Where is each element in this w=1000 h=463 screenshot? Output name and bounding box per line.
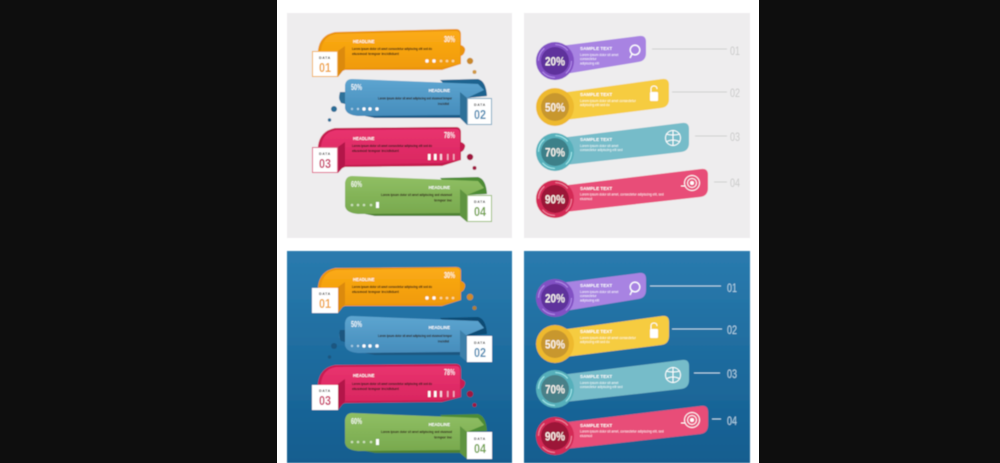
line and number — [695, 130, 740, 144]
banner 04 green: HEADLINE — [429, 185, 450, 190]
row 01 purple: consectetur — [580, 294, 597, 298]
banner 04 green: Lorem ipsum dolor sit amet adipiscing sed eiusmod — [381, 430, 452, 434]
banner 04 green — [345, 413, 492, 459]
row 03 teal: Lorem ipsum dolor sit amet — [580, 381, 619, 385]
row 03 teal — [536, 123, 740, 171]
icon: lock — [650, 323, 658, 338]
box 02: 02 — [474, 107, 486, 122]
box 04 — [460, 189, 492, 222]
line and number: 04 — [727, 414, 737, 428]
line and number: 01 — [730, 44, 740, 58]
box 03 — [312, 142, 345, 173]
box 03: 03 — [319, 393, 331, 408]
box 04 — [460, 426, 492, 459]
banner 04 green: Lorem ipsum dolor sit amet adipiscing sed eiusmod — [381, 193, 452, 197]
box 04: 04 — [474, 204, 487, 219]
box 02: DATA — [474, 103, 486, 107]
row 01 purple — [536, 36, 740, 80]
line and number — [652, 44, 740, 58]
row 01 purple — [536, 273, 737, 317]
row 01 purple: SAMPLE TEXT — [580, 283, 612, 288]
box 02 — [460, 330, 492, 362]
banner 02 blue: Lorem ipsum dolor sit amet adipiscing sed eiusmod tempor — [378, 96, 452, 100]
banner 03 pink — [312, 364, 476, 410]
row 04 pink: Lorem ipsum dolor sit amet, consectetur adipiscing elit, sed — [580, 192, 664, 196]
row 01 purple: 20% — [545, 54, 565, 68]
banner 02 blue — [328, 316, 492, 362]
row 02 yellow: Lorem ipsum dolor sit amet consectetur — [580, 99, 637, 103]
banner 02 blue: incidid — [438, 340, 449, 344]
rating icons — [428, 154, 454, 160]
banner 03 pink: 78% — [444, 368, 455, 377]
icon: target — [681, 412, 700, 428]
row 02 yellow: adipiscing elit sed do — [580, 340, 610, 344]
banner 04 green: tempor inc — [434, 198, 452, 202]
banner 03 pink: 78% — [444, 131, 455, 140]
row 02 yellow: SAMPLE TEXT — [580, 329, 612, 334]
line and number — [672, 86, 740, 100]
icon: target — [681, 176, 700, 190]
box 03: 03 — [319, 156, 331, 171]
row 03 teal: consectetur adipiscing elit sed — [580, 148, 623, 152]
banner 04 green: tempor inc — [434, 436, 452, 440]
row 04 pink: SAMPLE TEXT — [580, 186, 612, 191]
rating icons — [351, 202, 379, 208]
row 04 pink: 90% — [545, 192, 565, 206]
box 02: DATA — [474, 341, 486, 345]
row 02 yellow: Lorem ipsum dolor sit amet consectetur — [580, 336, 637, 340]
box 01 — [312, 282, 345, 313]
panel: light circles — [524, 13, 750, 238]
rating dots — [351, 344, 379, 348]
banner 03 pink — [312, 127, 476, 173]
box 01 — [312, 46, 345, 77]
banner 01 orange: eiusmod tempor incididunt — [352, 290, 400, 294]
line and number: 01 — [727, 281, 737, 295]
banner 01 orange: 30% — [444, 271, 455, 280]
banner 01 orange — [312, 267, 476, 313]
banner 03 pink: eiusmod tempor incididunt — [352, 387, 400, 391]
banner 03 pink: Lorem ipsum dolor sit amet consectetur adipiscing elit sed do — [352, 382, 432, 386]
row 04 pink: Lorem ipsum dolor sit amet, consectetur adipiscing elit, sed — [580, 430, 664, 434]
row 03 teal: consectetur adipiscing elit sed — [580, 385, 623, 389]
rating dots — [425, 59, 454, 63]
line and number — [712, 414, 737, 428]
banner 01 orange — [312, 29, 476, 77]
row 02 yellow — [536, 316, 737, 363]
line and number: 04 — [730, 176, 740, 190]
box 03: DATA — [319, 152, 331, 156]
row 03 teal: SAMPLE TEXT — [580, 137, 612, 142]
row 03 teal: SAMPLE TEXT — [580, 374, 612, 379]
icon: magnifier — [630, 45, 640, 58]
banner 04 green: HEADLINE — [429, 422, 450, 427]
banner 02 blue — [328, 79, 492, 125]
banner 01 orange: 30% — [444, 35, 455, 44]
banner 02 blue: 50% — [351, 320, 362, 329]
rating dots — [425, 296, 454, 300]
row 01 purple: adipiscing elit — [580, 62, 599, 66]
banner 04 green — [345, 176, 492, 222]
box 04: 04 — [474, 441, 487, 456]
line and number — [650, 281, 737, 295]
line and number: 02 — [727, 323, 737, 337]
box 03 — [312, 379, 345, 410]
row 04 pink: 90% — [545, 430, 565, 444]
white page column — [277, 0, 759, 463]
banner 04 green: 60% — [351, 180, 362, 189]
row 03 teal — [536, 360, 737, 408]
line and number: 02 — [730, 86, 740, 100]
row 04 pink: SAMPLE TEXT — [580, 423, 612, 428]
row 01 purple: Lorem ipsum dolor sit amet — [580, 53, 619, 57]
rating icons — [428, 391, 454, 397]
box 01: 01 — [319, 60, 331, 75]
row 03 teal: Lorem ipsum dolor sit amet — [580, 144, 619, 148]
row 02 yellow: SAMPLE TEXT — [580, 92, 612, 97]
row 04 pink: eiusmod — [580, 197, 592, 201]
row 02 yellow: 50% — [545, 338, 565, 352]
row 01 purple: 20% — [545, 292, 565, 306]
banner 02 blue: HEADLINE — [429, 88, 450, 93]
banner 03 pink: Lorem ipsum dolor sit amet consectetur adipiscing elit sed do — [352, 144, 432, 148]
rating icons — [351, 439, 379, 445]
panel: blue banners — [287, 251, 512, 463]
box 02 — [460, 92, 492, 125]
line and number — [714, 176, 740, 190]
banner 04 green: 60% — [351, 417, 362, 426]
row 03 teal: 70% — [545, 382, 565, 396]
banner 02 blue: Lorem ipsum dolor sit amet adipiscing sed eiusmod tempor — [378, 334, 452, 338]
box 04: DATA — [474, 437, 486, 441]
box 02: 02 — [474, 345, 486, 360]
line and number: 03 — [727, 367, 737, 381]
banner 02 blue: HEADLINE — [429, 325, 450, 330]
banner 01 orange: eiusmod tempor incididunt — [352, 52, 400, 56]
banner 01 orange: HEADLINE — [353, 39, 375, 44]
row 01 purple: SAMPLE TEXT — [580, 46, 612, 51]
row 01 purple: consectetur — [580, 57, 597, 61]
banner 03 pink: HEADLINE — [353, 373, 375, 378]
banner 02 blue: 50% — [351, 83, 362, 92]
box 01: 01 — [319, 296, 331, 311]
banner 02 blue: incidid — [438, 102, 449, 106]
icon: lock — [650, 86, 658, 101]
row 04 pink: eiusmod — [580, 434, 592, 438]
line and number: 03 — [730, 130, 740, 144]
line and number — [694, 367, 737, 381]
row 02 yellow — [536, 79, 740, 126]
rating dots — [351, 107, 379, 111]
box 01: DATA — [319, 292, 331, 296]
line and number — [672, 323, 737, 337]
icon: wheel — [666, 367, 680, 383]
row 04 pink — [536, 406, 737, 455]
icon: wheel — [666, 130, 680, 146]
row 04 pink — [536, 169, 740, 218]
row 01 purple: Lorem ipsum dolor sit amet — [580, 290, 619, 294]
banner 01 orange: HEADLINE — [353, 277, 375, 282]
banner 03 pink: eiusmod tempor incididunt — [352, 149, 400, 153]
box 01: DATA — [319, 56, 331, 60]
panel: light banners — [287, 13, 512, 238]
icon: magnifier — [630, 282, 640, 295]
box 03: DATA — [319, 389, 331, 393]
banner 01 orange: Lorem ipsum dolor sit amet consectetur adipiscing elit sed do — [352, 47, 432, 51]
row 02 yellow: 50% — [545, 100, 565, 114]
row 01 purple: adipiscing elit — [580, 298, 599, 302]
banner 01 orange: Lorem ipsum dolor sit amet consectetur adipiscing elit sed do — [352, 285, 432, 289]
panel: blue circles — [524, 251, 750, 463]
row 02 yellow: adipiscing elit sed do — [580, 103, 610, 107]
banner 03 pink: HEADLINE — [353, 136, 375, 141]
box 04: DATA — [474, 200, 486, 204]
row 03 teal: 70% — [545, 146, 565, 160]
